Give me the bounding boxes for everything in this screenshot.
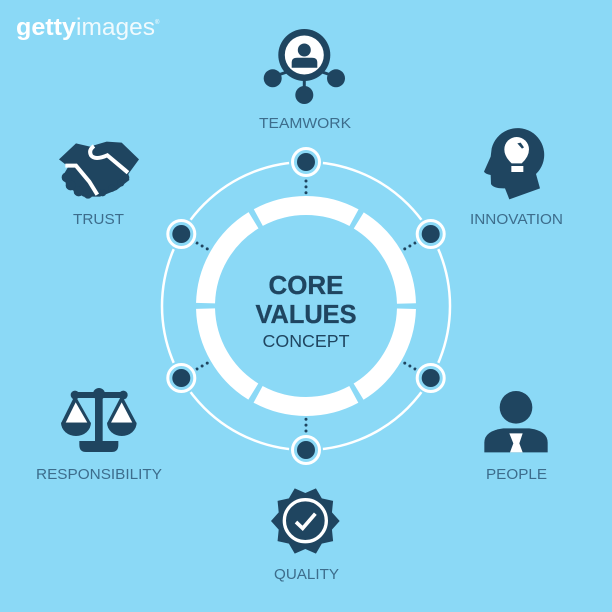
- icon: scales: [61, 388, 137, 452]
- central title: [256, 272, 356, 351]
- label: trust: TRUST: [73, 211, 124, 228]
- central title: CONCEPT: [262, 331, 350, 351]
- central title: VALUES: [256, 301, 356, 329]
- ring nodes: [164, 145, 448, 467]
- icon: person: [484, 391, 548, 452]
- label: quality: QUALITY: [274, 566, 339, 583]
- label: innovation: INNOVATION: [470, 211, 563, 228]
- icon: quality badge: [271, 488, 340, 554]
- outer ring: [162, 162, 450, 450]
- watermark logo: [16, 14, 160, 41]
- watermark logo: ®: [155, 19, 160, 26]
- icon: handshake: [59, 142, 139, 199]
- watermark logo: getty: [16, 14, 77, 41]
- icon: teamwork: [264, 29, 345, 104]
- label: teamwork: TEAMWORK: [259, 115, 351, 132]
- label: people: PEOPLE: [486, 466, 547, 483]
- segmented inner ring: [206, 206, 406, 406]
- label: responsibility: RESPONSIBILITY: [36, 466, 162, 483]
- dotted connectors: [197, 181, 415, 431]
- central title: CORE: [268, 272, 344, 300]
- icon: innovation head: [484, 128, 544, 199]
- watermark logo: images: [76, 14, 155, 41]
